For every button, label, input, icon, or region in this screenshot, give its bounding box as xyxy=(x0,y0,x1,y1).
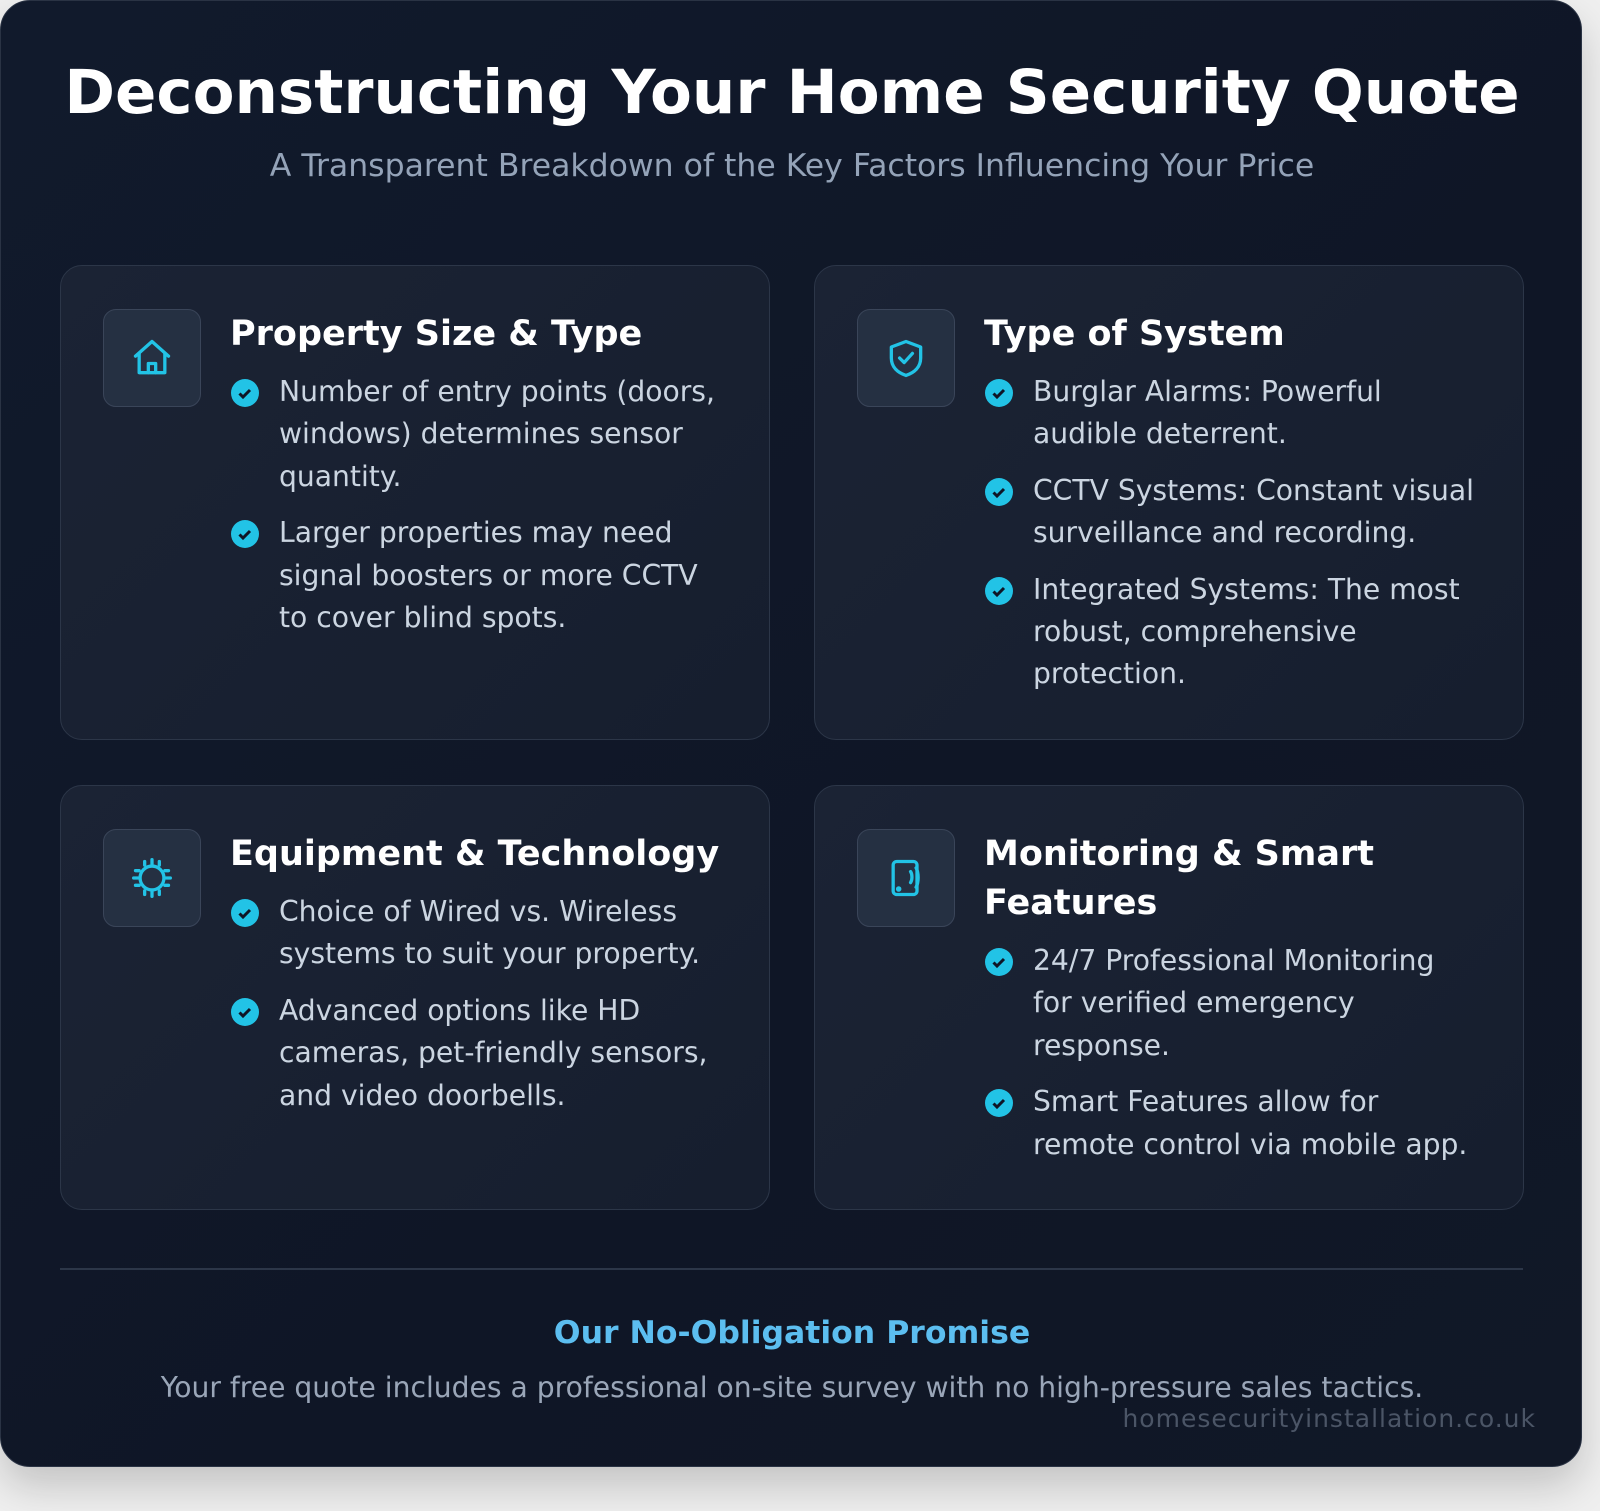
text: system xyxy=(984,314,1474,690)
text: system: robust, comprehensive xyxy=(1033,615,1357,648)
text: equipment: cameras, pet-friendly sensors, xyxy=(279,1036,707,1069)
text: system: surveillance and recording. xyxy=(1033,516,1416,549)
text: property: to cover blind spots. xyxy=(279,601,566,634)
text: property: signal boosters or more CCTV xyxy=(279,559,698,592)
text: system: audible deterrent. xyxy=(1033,417,1287,450)
text: monitoring: Monitoring & Smart xyxy=(984,834,1374,874)
icon: house xyxy=(103,309,201,407)
text: property: Number of entry points (doors, xyxy=(279,375,715,408)
title: Deconstructing Your Home Security Quote xyxy=(64,57,1520,128)
panel: equipment & technology xyxy=(60,785,770,1210)
panel: monitoring & smart features xyxy=(814,785,1524,1210)
text: monitoring: Smart Features allow for xyxy=(1033,1085,1378,1118)
text: monitoring: 24/7 Professional Monitoring xyxy=(1033,944,1434,977)
text: system: CCTV Systems: Constant visual xyxy=(1033,474,1474,507)
text: property xyxy=(230,314,715,634)
text: equipment: and video doorbells. xyxy=(279,1079,565,1112)
text: monitoring xyxy=(984,834,1467,1161)
promise heading: Our No-Obligation Promise xyxy=(554,1315,1030,1351)
text: monitoring: Features xyxy=(984,883,1157,923)
text: equipment: Advanced options like HD xyxy=(279,994,640,1027)
text: system: protection. xyxy=(1033,657,1186,690)
icon: shield xyxy=(857,309,955,407)
text: property: quantity. xyxy=(279,460,401,493)
text: equipment: systems to suit your property. xyxy=(279,937,700,970)
text: equipment: Equipment & Technology xyxy=(230,834,719,874)
text: monitoring: remote control via mobile app. xyxy=(1033,1128,1467,1161)
text: property: Larger properties may need xyxy=(279,516,672,549)
text: monitoring: for verified emergency xyxy=(1033,986,1355,1019)
text: monitoring: response. xyxy=(1033,1029,1170,1062)
subtitle: A Transparent Breakdown of the Key Factors Influencing Your Price xyxy=(270,148,1314,184)
promise text: Your free quote includes a professional on-site survey with no high-pressure sales tactics. xyxy=(161,1371,1423,1404)
text: property: windows) determines sensor xyxy=(279,417,683,450)
text: property: Property Size & Type xyxy=(230,314,642,354)
watermark: homesecurityinstallation.co.uk xyxy=(1122,1404,1536,1433)
panel: type of system xyxy=(814,265,1524,740)
text: system: Integrated Systems: The most xyxy=(1033,573,1460,606)
text: system: Burglar Alarms: Powerful xyxy=(1033,375,1382,408)
icon: chip xyxy=(103,829,201,927)
text: system: Type of System xyxy=(984,314,1285,354)
panel: property size & type xyxy=(60,265,770,740)
text: equipment xyxy=(230,834,719,1112)
icon: mobile xyxy=(857,829,955,927)
text: equipment: Choice of Wired vs. Wireless xyxy=(279,895,677,928)
